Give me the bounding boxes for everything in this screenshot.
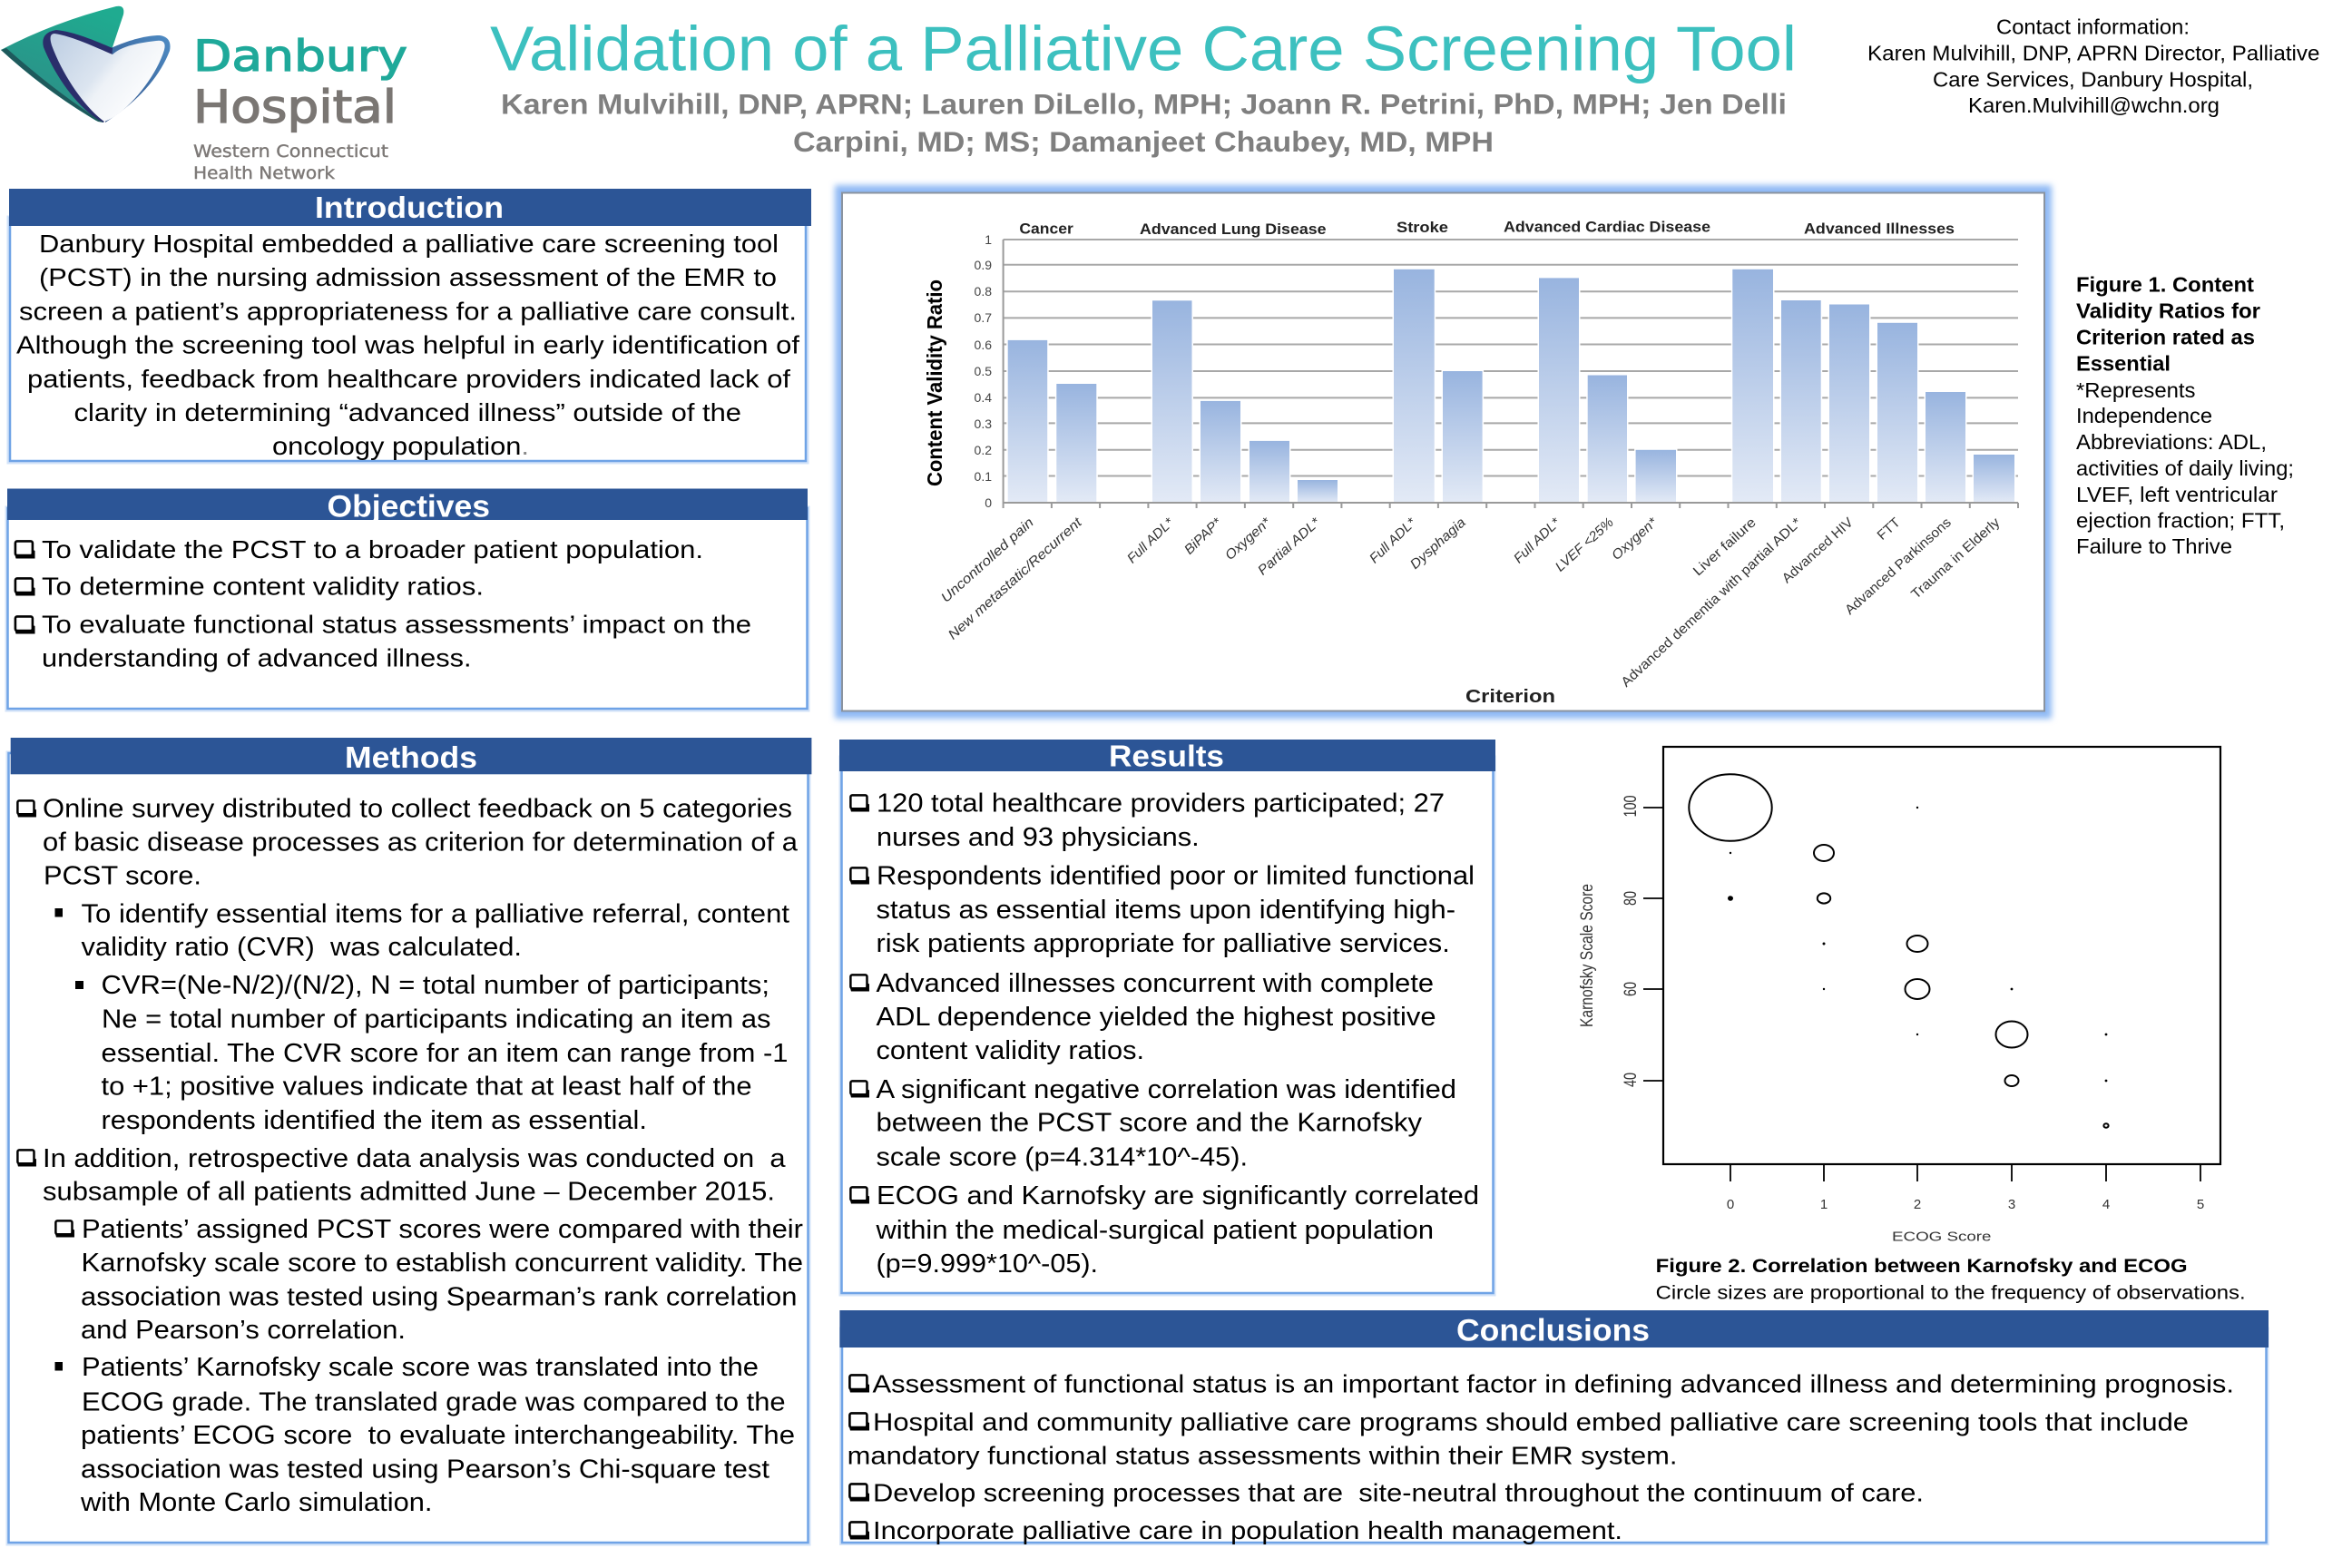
- heading: methods: [11, 738, 811, 774]
- logo wordmark: Hospital: [193, 81, 397, 133]
- list: results: risk patients appropriate for palliative services.: [877, 929, 1450, 958]
- x axis category labels: FTT: [1874, 514, 1904, 544]
- x tick labels: 2: [1914, 1197, 1921, 1212]
- axes: [1004, 240, 2018, 508]
- category group labels: Advanced Lung Disease: [1140, 220, 1327, 238]
- panel: methods: [8, 738, 811, 1544]
- x tick labels: 4: [2102, 1197, 2110, 1212]
- x axis category labels: BiPAP*: [1181, 514, 1226, 558]
- list: results: scale score (p=4.314*10^-45).: [877, 1143, 1248, 1172]
- heading: results: Results: [1109, 739, 1224, 772]
- list: results: ECOG and Karnofsky are significantly correlated: [877, 1181, 1479, 1210]
- y axis title: Content Validity Ratio: [923, 279, 946, 486]
- list: retrospective analysis: ECOG grade. The translated grade was compared to the: [82, 1387, 786, 1416]
- y axis tick labels: 0.5: [975, 364, 992, 378]
- x axis category labels: Advanced HIV: [1779, 514, 1857, 586]
- text block: introduction: [16, 230, 799, 460]
- list: retrospective analysis: association was tested using Spearman’s rank correlation: [81, 1283, 797, 1312]
- heading: results: [839, 739, 1495, 772]
- contact information: Karen.Mulvihill@wchn.org: [1968, 93, 2220, 117]
- heading: introduction: [9, 189, 811, 226]
- list: retrospective analysis: and Pearson’s correlation.: [81, 1316, 406, 1345]
- x tick labels: 1: [1820, 1197, 1828, 1212]
- contact information: Karen Mulvihill, DNP, APRN Director, Palliative: [1867, 42, 2319, 65]
- text block: introduction: patients, feedback from healthcare providers indicated lack of: [27, 365, 790, 393]
- figure 1 caption: [2076, 272, 2294, 558]
- x axis category labels: Advanced dementia with partial ADL*: [1618, 514, 1805, 691]
- x axis category labels: Oxygen*: [1609, 514, 1661, 564]
- y tick labels: 100: [1622, 795, 1641, 817]
- panel: objectives: [7, 488, 808, 710]
- tiny observation dots: [1730, 807, 2107, 1082]
- figure 1 caption: Independence: [2076, 404, 2212, 427]
- authors: Karen Mulvihill, DNP, APRN; Lauren DiLello, MPH; Joann R. Petrini, PhD, MPH; Jen Delli: [501, 88, 1787, 121]
- heading: objectives: [7, 488, 808, 524]
- figure 1 caption: ejection fraction; FTT,: [2076, 509, 2285, 533]
- list: retrospective analysis: Patients’ Karnofsky scale score was translated into the: [82, 1353, 759, 1382]
- x axis category labels: Liver failure: [1690, 514, 1759, 579]
- figure 1 caption: Validity Ratios for: [2076, 299, 2260, 323]
- list: online survey: PCST score.: [44, 862, 201, 891]
- list: online survey: essential. The CVR score for an item can range from -1: [102, 1039, 788, 1068]
- text block: introduction: Danbury Hospital embedded a palliative care screening tool: [39, 230, 779, 258]
- text block: introduction: Although the screening tool was helpful in early identification of: [16, 330, 799, 359]
- y axis tick labels: 0.9: [975, 258, 992, 272]
- figure 1 caption: LVEF, left ventricular: [2076, 483, 2278, 506]
- x axis title: ECOG Score: [1892, 1230, 1991, 1245]
- panel: figure 1 bar chart frame: [835, 185, 2052, 719]
- list: objectives: To determine content validity ratios.: [42, 573, 484, 601]
- list: conclusions: [848, 1369, 2234, 1544]
- contact information: Care Services, Danbury Hospital,: [1933, 67, 2253, 91]
- y axis tick labels: 0.6: [975, 338, 992, 352]
- x axis category labels: Uncontrolled pain: [938, 514, 1037, 606]
- list: retrospective analysis: [17, 1144, 803, 1517]
- heading: methods: Methods: [345, 740, 477, 774]
- list: results: ADL dependence yielded the highest positive: [877, 1003, 1436, 1032]
- list: conclusions: Develop screening processes that are site-neutral throughout the continuum of care.: [873, 1478, 1924, 1506]
- text block: introduction: clarity in determining “advanced illness” outside of the: [74, 398, 741, 426]
- figure 1 caption: Essential: [2076, 352, 2171, 376]
- list: retrospective analysis: In addition, retrospective data analysis was conducted on a: [43, 1144, 787, 1173]
- plot axis ticks: [1643, 808, 2200, 1181]
- x axis category labels: Advanced Parkinsons: [1842, 514, 1955, 618]
- bubbles: [1689, 774, 2109, 1128]
- y tick labels: 80: [1622, 891, 1641, 906]
- list: objectives: understanding of advanced illness.: [42, 643, 472, 671]
- contact information: [1867, 15, 2319, 117]
- list: results: content validity ratios.: [877, 1036, 1144, 1065]
- x tick labels: 3: [2008, 1197, 2015, 1212]
- category group labels: [1019, 218, 1955, 238]
- y axis tick labels: [975, 232, 992, 510]
- contact information: Contact information:: [1996, 15, 2190, 38]
- list: conclusions: Assessment of functional status is an important factor in defining advanced illness and determining prognosis.: [873, 1369, 2234, 1397]
- authors: [501, 88, 1787, 158]
- heading: conclusions: Conclusions: [1456, 1314, 1650, 1348]
- y axis tick labels: 0.8: [975, 284, 992, 299]
- category group labels: Advanced Cardiac Disease: [1504, 218, 1710, 236]
- category group labels: Cancer: [1019, 220, 1073, 237]
- text block: introduction: (PCST) in the nursing admission assessment of the EMR to: [39, 263, 777, 291]
- list: results: Advanced illnesses concurrent with complete: [877, 969, 1434, 998]
- list: conclusions: Incorporate palliative care in population health management.: [873, 1516, 1622, 1544]
- list: online survey: Ne = total number of participants indicating an item as: [102, 1005, 771, 1034]
- bars: [1008, 270, 2014, 503]
- figure 1 caption: *Represents: [2076, 378, 2196, 402]
- x axis category labels: Full ADL*: [1511, 514, 1564, 566]
- title: Validation of a Palliative Care Screening Tool: [490, 13, 1797, 83]
- authors: Carpini, MD; MS; Damanjeet Chaubey, MD, MPH: [793, 125, 1494, 158]
- list: online survey: CVR=(Ne-N/2)/(N/2), N = total number of participants;: [102, 971, 769, 1000]
- x axis category labels: Oxygen*: [1222, 514, 1275, 564]
- list: results: Respondents identified poor or limited functional: [877, 862, 1475, 891]
- heading: objectives: Objectives: [327, 489, 490, 524]
- list: online survey: [17, 795, 799, 1135]
- y tick labels: 60: [1622, 982, 1641, 996]
- list: results: within the medical-surgical patient population: [875, 1216, 1434, 1245]
- list: online survey: of basic disease processes as criterion for determination of a: [43, 828, 799, 857]
- x axis category labels: Trauma in Elderly: [1908, 514, 2004, 603]
- category group labels: Advanced Illnesses: [1804, 220, 1955, 237]
- text block: introduction: oncology population .: [272, 432, 529, 460]
- logo: Danbury Hospital: [1, 6, 407, 183]
- y tick labels: 40: [1622, 1073, 1641, 1087]
- bar chart: content validity ratios: [923, 218, 2018, 707]
- list: results: A significant negative correlation was identified: [877, 1075, 1456, 1104]
- y axis title: Karnofsky Scale Score: [1578, 884, 1597, 1027]
- figure 1 caption: Failure to Thrive: [2076, 534, 2232, 558]
- list: results: (p=9.999*10^-05).: [877, 1250, 1098, 1279]
- list: retrospective analysis: patients’ ECOG score to evaluate interchangeability. The: [81, 1421, 795, 1450]
- list: online survey: Online survey distributed to collect feedback on 5 categories: [43, 795, 792, 824]
- y axis tick labels: 0.3: [975, 416, 992, 431]
- list: retrospective analysis: Karnofsky scale score to establish concurrent validity. The: [82, 1249, 803, 1278]
- list: retrospective analysis: with Monte Carlo simulation.: [80, 1488, 432, 1517]
- x axis category labels: Full ADL*: [1367, 514, 1420, 566]
- text block: introduction: screen a patient’s appropriateness for a palliative care consult.: [19, 298, 797, 326]
- list: results: [850, 789, 1479, 1279]
- list: conclusions: mandatory functional status assessments within their EMR system.: [848, 1442, 1677, 1470]
- y axis tick labels: 0.2: [975, 443, 992, 457]
- x tick labels: 0: [1727, 1197, 1734, 1212]
- list: conclusions: Hospital and community palliative care programs should embed palliative care screening tools that include: [873, 1407, 2189, 1436]
- list: results: status as essential items upon identifying high-: [877, 896, 1455, 925]
- icon: logo mark: [1, 6, 171, 122]
- list: online survey: To identify essential items for a palliative referral, content: [82, 900, 789, 929]
- category group labels: Stroke: [1396, 219, 1448, 236]
- list: results: nurses and 93 physicians.: [877, 823, 1200, 852]
- figure 2 caption: [1656, 1256, 2246, 1304]
- x tick labels: [1727, 1197, 2204, 1212]
- list: objectives: To validate the PCST to a broader patient population.: [42, 535, 703, 564]
- list: objectives: To evaluate functional status assessments’ impact on the: [42, 611, 751, 639]
- panel: conclusions: [839, 1310, 2269, 1544]
- y axis tick labels: 1: [985, 232, 992, 247]
- list: retrospective analysis: Patients’ assigned PCST scores were compared with their: [82, 1215, 803, 1244]
- logo wordmark: Western Connecticut: [193, 142, 388, 162]
- x axis category labels: Full ADL*: [1124, 514, 1178, 566]
- logo wordmark: Danbury: [193, 32, 407, 82]
- y axis tick labels: 0.1: [975, 469, 992, 484]
- figure 2 caption: Circle sizes are proportional to the frequency of observations.: [1656, 1283, 2246, 1304]
- list: online survey: to +1; positive values indicate that at least half of the: [102, 1073, 751, 1102]
- panel: results: [839, 739, 1495, 1294]
- list: online survey: validity ratio (CVR) was calculated.: [82, 933, 522, 962]
- x axis category labels: Dysphagia: [1407, 514, 1469, 573]
- x axis category labels: New metastatic/Recurrent: [946, 514, 1085, 642]
- scatter plot: Karnofsky vs ECOG: [1578, 747, 2220, 1245]
- y tick labels: [1622, 795, 1641, 1087]
- y axis tick labels: 0.4: [975, 390, 992, 405]
- logo wordmark: Health Network: [193, 163, 335, 183]
- heading: conclusions: [839, 1310, 2269, 1348]
- x axis title: Criterion: [1465, 687, 1555, 707]
- list: retrospective analysis: subsample of all patients admitted June – December 2015.: [43, 1178, 775, 1207]
- list: retrospective analysis: association was tested using Pearson’s Chi-square test: [81, 1455, 769, 1484]
- x tick labels: 5: [2197, 1197, 2204, 1212]
- list: online survey: respondents identified the item as essential.: [102, 1106, 647, 1135]
- heading: introduction: Introduction: [315, 191, 504, 224]
- y axis tick labels: 0: [985, 495, 992, 510]
- x axis category labels: [938, 514, 2004, 691]
- list: objectives: [15, 535, 751, 671]
- figure 1 caption: activities of daily living;: [2076, 456, 2294, 480]
- figure 1 caption: Criterion rated as: [2076, 325, 2255, 348]
- panel: introduction: [9, 189, 811, 462]
- x axis category labels: LVEF <25%: [1553, 514, 1617, 575]
- figure 2 caption: Figure 2. Correlation between Karnofsky and ECOG: [1656, 1256, 2188, 1277]
- y axis tick labels: 0.7: [975, 310, 992, 325]
- figure 1 caption: Abbreviations: ADL,: [2076, 430, 2267, 454]
- list: results: 120 total healthcare providers participated; 27: [877, 789, 1445, 818]
- x axis category labels: Partial ADL*: [1255, 514, 1324, 579]
- list: results: between the PCST score and the Karnofsky: [877, 1109, 1423, 1138]
- logo wordmark: [193, 32, 407, 183]
- figure 1 caption: Figure 1. Content: [2076, 272, 2254, 296]
